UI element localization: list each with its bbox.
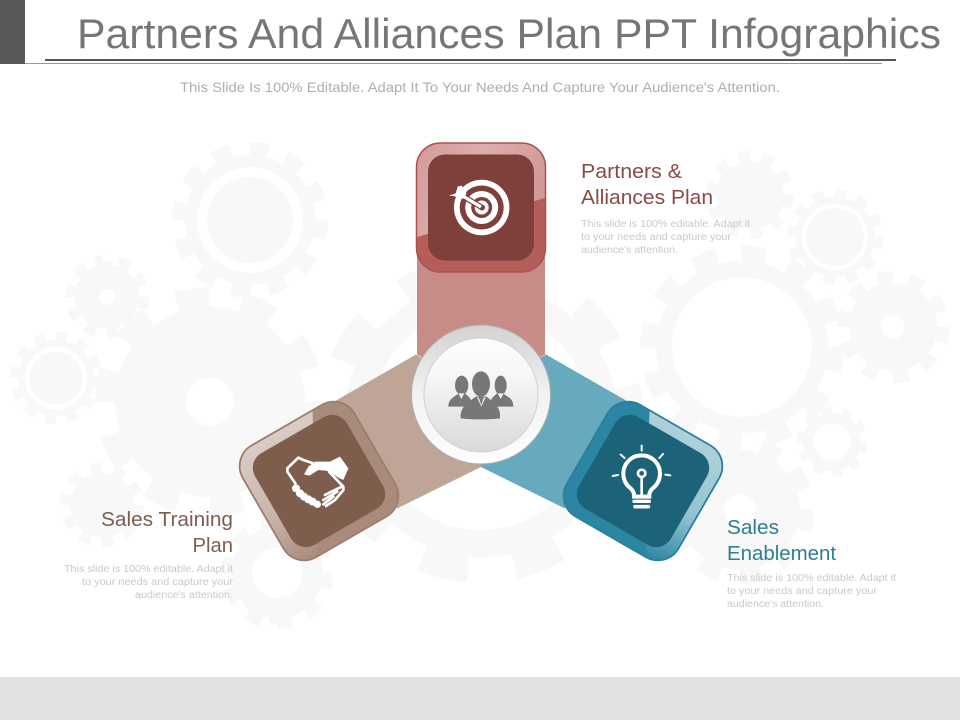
- description: sales enablement: to your needs and capture your: [727, 586, 878, 597]
- footer band: [0, 677, 960, 720]
- heading: partners: Alliances Plan: [581, 187, 713, 209]
- gear: far right solid: [844, 278, 942, 376]
- background gears: [15, 149, 942, 623]
- arm: partners band: [417, 250, 545, 392]
- header accent block: [0, 0, 25, 64]
- title: Partners And Alliances Plan PPT Infographics: [77, 10, 941, 57]
- description: sales training: This slide is 100% editable. Adapt it: [64, 564, 233, 575]
- tile: sales enablement: [562, 400, 724, 562]
- icon: handshake: [287, 457, 348, 508]
- description: sales training: to your needs and capture your: [82, 577, 234, 588]
- centre hub: [412, 325, 550, 464]
- description: partners: to your needs and capture your: [581, 232, 732, 243]
- heading: sales enablement: Enablement: [727, 543, 836, 565]
- icon: team of three people: [448, 371, 513, 419]
- heading: partners: Partners &: [581, 161, 683, 183]
- gear: lower right small: [801, 411, 863, 473]
- icon: light bulb: [613, 446, 670, 507]
- label: sales enablement: [727, 517, 896, 610]
- gear: right large ring: [650, 255, 834, 439]
- gear: bottom ring: [227, 523, 327, 623]
- tile: sales training: [238, 400, 400, 562]
- description: sales enablement: audience's attention.: [727, 599, 824, 610]
- tile: partners and alliances: [416, 142, 546, 272]
- heading: sales training: Plan: [192, 535, 233, 557]
- description: sales training: audience's attention.: [135, 590, 233, 601]
- gear: upper left ring: [179, 149, 321, 291]
- gear: large centre ring: [301, 240, 661, 600]
- gear: small left solid: [71, 261, 143, 333]
- description: partners: audience's attention.: [581, 245, 678, 256]
- arm: sales enablement band: [481, 354, 626, 508]
- gear: upper far right ring: [792, 194, 878, 280]
- subtitle: This Slide Is 100% Editable. Adapt It To Your Needs And Capture Your Audience's Attention.: [180, 79, 780, 95]
- gear: upper right solid: [712, 157, 788, 233]
- gear: large left solid: [107, 299, 313, 505]
- heading: sales training: Sales Training: [101, 509, 233, 531]
- arm: sales training band: [336, 354, 481, 508]
- label: sales training plan: [64, 509, 234, 601]
- gear: lower right solid: [674, 444, 806, 576]
- gear: far left ring: [15, 337, 97, 419]
- heading: sales enablement: Sales: [727, 517, 779, 539]
- gear: lower left solid: [66, 469, 138, 541]
- title rule: [25, 59, 896, 64]
- label: partners and alliances plan: [581, 161, 750, 256]
- description: sales enablement: This slide is 100% editable. Adapt it: [727, 573, 896, 584]
- icon: target with arrow: [449, 180, 510, 235]
- description: partners: This slide is 100% editable. Adapt it: [581, 219, 750, 230]
